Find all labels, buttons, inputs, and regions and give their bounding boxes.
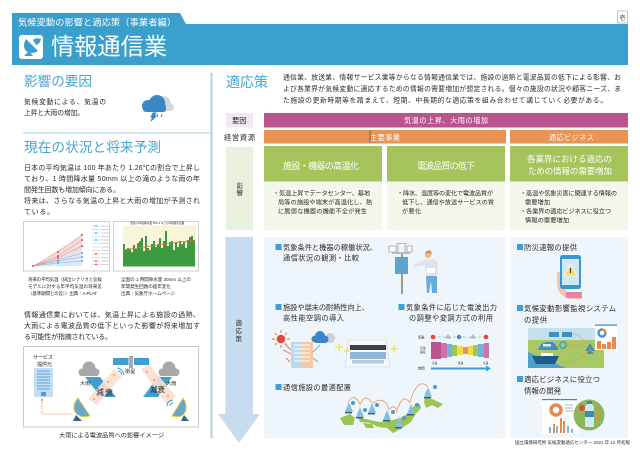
- impact: equipment overheating: 施設・機器の高温化: [283, 160, 359, 171]
- adaptation intro: た施設の更新時期等を踏まえて、短期、中長期的な適応策を組み合わせて講じていく必要がある。: [283, 96, 607, 104]
- illustration: data charts and bottle: [542, 399, 604, 434]
- icon: satellite dish: [19, 35, 43, 59]
- arrow: adaptation measures: 策: [236, 334, 242, 343]
- impact: equipment overheating: 局等の施設や端末が高温化し、熱: [278, 198, 373, 206]
- measure: information development: 適応ビジネスに役立つ: [524, 375, 600, 384]
- service provider: 提供元: [37, 360, 53, 368]
- page tag: 壱: [620, 14, 626, 22]
- impact: signal quality: ・降水、温度等の変化で電波品質が: [397, 190, 494, 198]
- chart caption: temperature: 将来の平均気温（排出シナリオと気候: [28, 276, 102, 283]
- header band: [12, 13, 628, 65]
- row: cause: 要因: [232, 116, 247, 125]
- illustration: modulation adjustment chart: 気象: [418, 334, 425, 340]
- chart caption: rainfall: 出典：気象庁ホームページ: [121, 290, 175, 297]
- measure: heat resistance: 高性能空調の導入: [283, 314, 344, 322]
- measure: information development: [517, 375, 600, 396]
- diagram caption: 大雨による電波品質への影響イメージ: [59, 432, 164, 440]
- impact: equipment overheating: に脆弱な機器の機能不全が発生: [278, 208, 367, 216]
- chart caption: rainfall: [121, 276, 191, 297]
- icon: rain cloud: [142, 95, 174, 121]
- heading: current state: 現在の状況と将来予測: [24, 140, 161, 155]
- beams, clouds and attenuation: 減衰: [150, 384, 166, 394]
- paragraph: current state: ている。: [24, 208, 54, 216]
- chart caption: temperature: （基準期間との差））出典：A-PLAT: [28, 290, 97, 297]
- chart caption: rainfall: 全国の 1 時間降水量 30mm 以上の: [121, 276, 191, 283]
- paragraph: current state: 将来は、さらなる気温の上昇と大雨の増加が予測され: [24, 196, 200, 205]
- factors text: [24, 97, 106, 117]
- row label: impacts: [226, 147, 253, 230]
- measure: optimal placement: 通信施設の最適配置: [283, 383, 351, 392]
- service provider: サービス: [33, 353, 53, 361]
- adaptation intro: [283, 72, 621, 104]
- impact: signal quality: が悪化: [402, 208, 421, 216]
- main title: 情報通信業: [51, 34, 167, 60]
- illustration: sun, building, cloud, air conditioner: [272, 330, 398, 368]
- measure: weather observation: 気象条件と機器の稼働状況、: [283, 243, 377, 252]
- beams, clouds and attenuation: 大雨: [80, 379, 91, 387]
- panel: current state and projections: [24, 140, 200, 440]
- arrow: adaptation measures: [218, 237, 260, 443]
- diagram: rain effect on radio quality: [24, 346, 198, 427]
- bar chart: heavy rain frequency: 全国の1時間降水量 50mm 以上の年間発生回数: [130, 221, 185, 225]
- illustration: modulation adjustment chart: 高速: [432, 361, 438, 365]
- chart caption: temperature: [28, 276, 102, 297]
- bar chart: heavy rain frequency: [114, 221, 198, 271]
- factors text: 気候変動による、気温の: [24, 97, 106, 106]
- chart caption: temperature: モデルに対する年平均気温の将来差: [28, 283, 102, 290]
- impact: information demand: 情報の需要増加: [525, 216, 569, 224]
- beams, clouds and attenuation: [78, 362, 180, 405]
- illustration: weather station and person: [389, 244, 438, 294]
- impact: information demand: ・各業界の適応ビジネスに役立つ: [520, 208, 611, 216]
- impact: information demand: ・高温や気象災害に関連する情報の: [520, 190, 617, 198]
- paragraph: sector impact: [24, 310, 200, 341]
- impact: information demand: 各業界における適応の: [527, 154, 612, 164]
- paragraph: sector impact: 大雨による電波品質の低下といった影響が将来増加す: [24, 321, 200, 330]
- illustration: modulation adjustment chart: [418, 334, 491, 372]
- heading: adaptation: 適応策: [226, 74, 268, 90]
- panel: adaptation business measures: [510, 237, 628, 438]
- row: business resources: [224, 130, 628, 144]
- measure: weather observation: [276, 243, 377, 262]
- measure: heat resistance: 施設や端末の耐熱性向上、: [283, 303, 369, 312]
- impact: signal quality: 低下し、通信や放送サービスの質: [402, 198, 494, 206]
- measure: monitoring system: の提供: [524, 316, 548, 324]
- line chart: projected temperature: [24, 222, 110, 271]
- impact: equipment overheating: ・気温上昇でデータセンター、基地: [273, 190, 370, 198]
- page tag: [618, 11, 628, 23]
- impact: information demand: ための情報の需要増加: [528, 166, 612, 176]
- measure: output adjustment: の調整や変調方式の利用: [409, 314, 493, 322]
- paragraph: sector impact: る可能性が指摘されている。: [24, 332, 112, 341]
- arrow: adaptation measures: 適: [236, 318, 242, 327]
- beams, clouds and attenuation: 減衰: [96, 387, 113, 397]
- paragraph: current state: 間発生回数も増加傾向にある。: [24, 185, 120, 194]
- satellite: [113, 356, 149, 375]
- column divider: [210, 73, 212, 438]
- panel: factors: [24, 74, 174, 121]
- arrow: adaptation measures: 応: [236, 327, 242, 335]
- footer credit: 国立環境研究所 気候変動適応センター 2021 年 12 月初版: [515, 439, 630, 446]
- illustration: modulation adjustment chart: 伝送: [420, 346, 426, 350]
- header subtitle: 気候変動の影響と適応策（事業者編）: [18, 16, 176, 28]
- paragraph: sector impact: 情報通信業においては、気温上昇による施設の過熱、: [24, 310, 200, 319]
- measure: heat resistance: [276, 303, 369, 322]
- adaptation intro: 通信業、放送業、情報サービス業等からなる情報通信業では、施設の過熱と電波品質の低下による影響、お: [283, 72, 621, 82]
- panel: main business measures: [264, 237, 506, 438]
- paragraph: current state: ており、1 時間降水量 50mm 以上の滝のような雨の年: [24, 174, 200, 183]
- service provider: [33, 353, 53, 397]
- impact: signal quality: [387, 146, 505, 230]
- measure: disaster alerts: 防災速報の提供: [524, 243, 578, 252]
- satellite: 衛星: [125, 367, 136, 375]
- impact: equipment overheating: [264, 146, 382, 230]
- illustration: modulation adjustment chart: 高速: [483, 361, 489, 365]
- row: cause: 気温の上昇、大雨の増加: [404, 116, 488, 125]
- illustration: modulation adjustment chart: 時間: [418, 366, 425, 370]
- impact: information demand: 需要増加: [525, 198, 550, 206]
- row: business resources: 適応ビジネス: [549, 133, 594, 142]
- beams, clouds and attenuation: 大雨: [166, 379, 177, 387]
- illustration: modulation adjustment chart: 速度: [420, 350, 426, 354]
- factors text: 上昇と大雨の増加。: [24, 108, 84, 117]
- row: business resources: 主要事業: [370, 133, 400, 142]
- illustration: Japan map with antennas: [340, 384, 443, 433]
- impact: information demand: [510, 146, 628, 230]
- heading: factors: 影響の要因: [24, 74, 92, 89]
- dishes: [73, 398, 189, 421]
- impact: signal quality: 電波品質の低下: [417, 160, 475, 171]
- chart caption: rainfall: 年間発生回数の経年変化: [121, 283, 171, 290]
- row: business resources: 経営資源: [224, 133, 256, 142]
- paragraph: current state: 日本の平均気温は 100 年あたり 1.26℃の割合で上昇し: [24, 163, 200, 172]
- panel: adaptation heading and intro: [226, 72, 621, 104]
- illustration: modulation adjustment chart: 低速: [458, 361, 464, 365]
- row: cause: [226, 113, 628, 128]
- measure: information development: 情報の開発: [524, 386, 562, 396]
- measure: output adjustment: 気象条件に応じた電波出力: [406, 303, 497, 312]
- illustration: smartphone alert: [557, 255, 582, 299]
- measure: monitoring system: 気候変動影響監視システム: [524, 304, 616, 313]
- measure: weather observation: 通信状況の観測・比較: [283, 254, 359, 262]
- illustration: monitoring system: [528, 324, 617, 368]
- adaptation intro: よび各業界が気候変動に適応するための情報の需要増加が想定される。個々の施設の状況や顧客ニーズ、ま: [283, 84, 621, 93]
- measure: monitoring system: [517, 304, 616, 324]
- paragraph: current state: [24, 163, 200, 216]
- row label: impacts: 響: [236, 188, 244, 197]
- measure: output adjustment: [398, 303, 497, 322]
- row label: impacts: 影: [236, 181, 244, 190]
